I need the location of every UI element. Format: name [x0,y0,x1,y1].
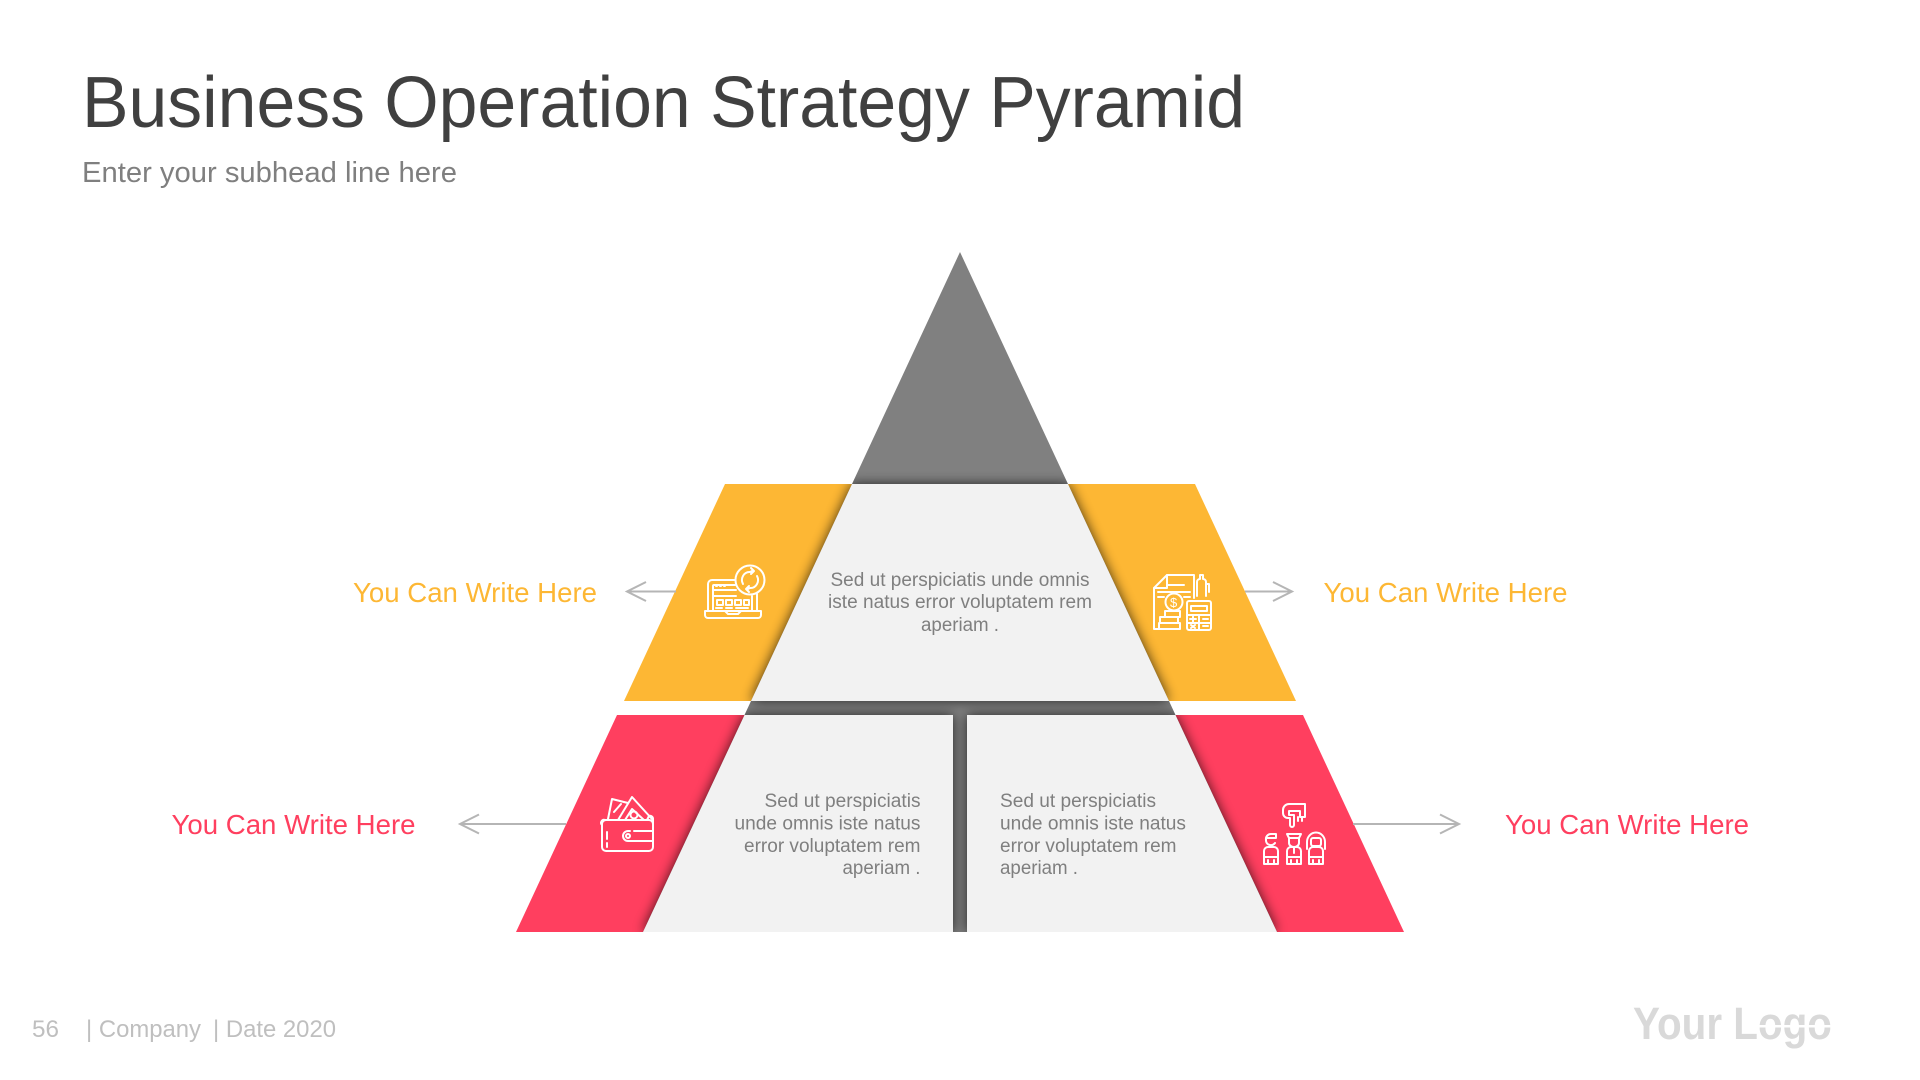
text: lower left [734,791,920,879]
icon: finance documents: $ [1170,595,1178,610]
text: centre tier [828,570,1092,636]
panel: lower right [967,715,1277,932]
subhead: Enter your subhead line here [82,157,457,189]
footer: 56 [32,1016,59,1043]
arrow: lower left [460,814,566,834]
text: lower right: error voluptatem rem [1000,836,1176,857]
icon: team with paint roller [1264,804,1325,864]
footer: | Company [86,1016,201,1043]
text: lower left: Sed ut perspiciatis [764,791,920,812]
text: lower right [1000,791,1186,879]
logo: Your Logo [1633,998,1832,1049]
text: lower left: unde omnis iste natus [734,814,920,834]
text: centre tier: iste natus error voluptatem rem [828,592,1092,613]
icon: finance documents [1154,575,1211,630]
panel: centre tier [751,484,1169,701]
band: red tier [516,715,1404,932]
text: lower right: Sed ut perspiciatis [1000,791,1156,812]
title: Business Operation Strategy Pyramid [82,63,1245,143]
panel shadows [643,484,1277,932]
label: upper left: You Can Write Here [353,577,597,608]
pyramid [516,252,1404,932]
label: lower right: You Can Write Here [1505,809,1749,840]
arrow: upper right [1245,582,1292,601]
arrow: lower right [1353,814,1459,834]
arrow: upper left [627,582,676,601]
label: upper right: You Can Write Here [1324,577,1568,608]
icon: laptop with sync [705,566,764,618]
label: lower left: You Can Write Here [172,809,416,840]
text: centre tier: Sed ut perspiciatis unde omnis [830,570,1090,591]
footer: | Date 2020 [213,1016,336,1043]
text: centre tier: aperiam . [921,615,999,636]
pyramid apex and grey frame [643,252,1277,932]
text: lower right: aperiam . [1000,858,1078,879]
icon: wallet [601,797,653,851]
band: yellow tier [624,484,1296,701]
text: lower left: aperiam . [842,858,920,879]
footer [32,1016,336,1043]
text: lower right: unde omnis iste natus [1000,814,1186,834]
text: lower left: error voluptatem rem [744,836,920,857]
panel: lower left [643,715,953,932]
